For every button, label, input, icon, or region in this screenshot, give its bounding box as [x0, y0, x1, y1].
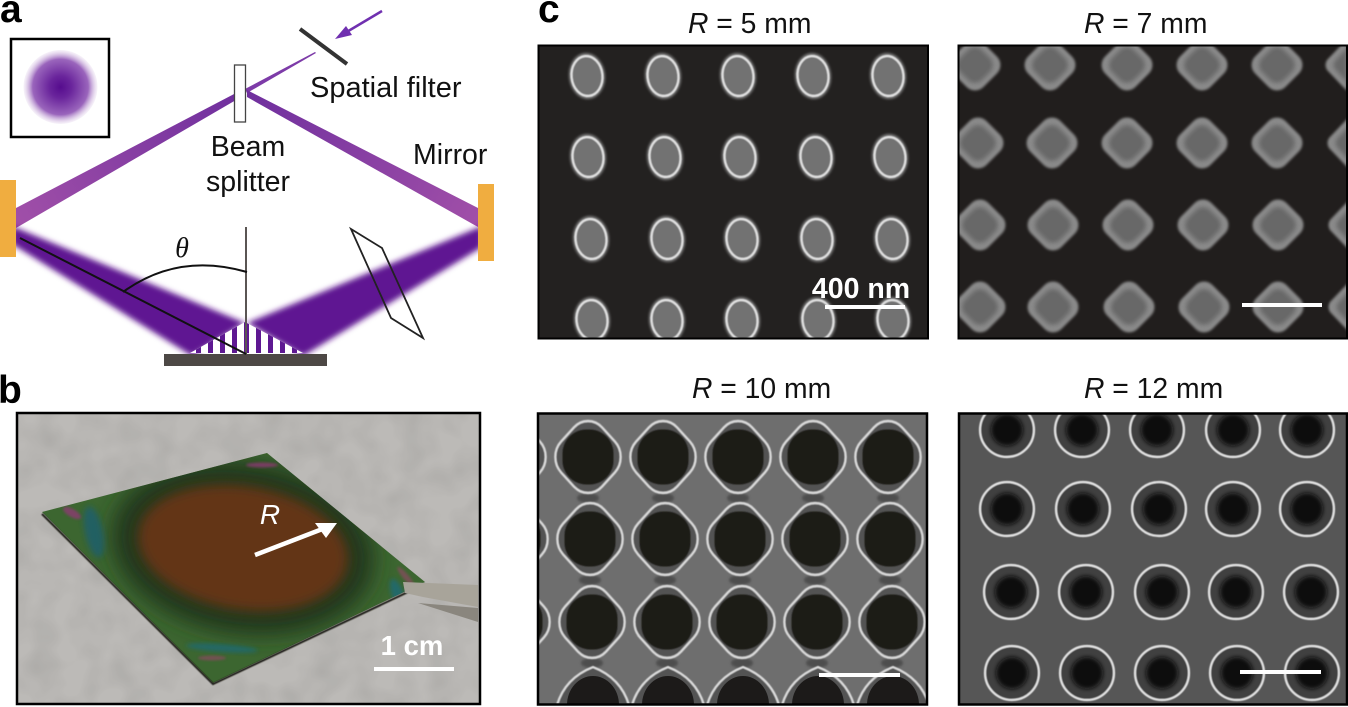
- scale bar: [1240, 670, 1321, 674]
- interference fringe pattern: [190, 322, 303, 353]
- scale bar: [825, 305, 905, 309]
- SEM panel: R = 5 mm: [538, 7, 928, 345]
- icon: incoming laser arrow: [335, 11, 382, 39]
- label: theta: θ: [175, 233, 189, 264]
- scale bar: [374, 667, 454, 671]
- beam splitter: [234, 65, 246, 122]
- spatial filter slit: [300, 29, 347, 64]
- SEM image: hole lattice: [539, 414, 926, 704]
- scale bar: [819, 673, 900, 677]
- wafer with structural colour: [42, 442, 425, 684]
- scale label 1 cm: 1 cm: [381, 630, 443, 661]
- heading R = 12 mm: R = 12 mm: [1084, 372, 1223, 404]
- frame: [17, 413, 480, 704]
- radius arrow: [255, 523, 337, 555]
- heading R = 5 mm: R = 5 mm: [688, 7, 811, 39]
- right mirror: [478, 184, 494, 261]
- lower right beam: [247, 226, 482, 356]
- lower left beam: [12, 226, 245, 356]
- upper left beam: [16, 93, 236, 228]
- scale bar: [1242, 303, 1322, 307]
- frame: [538, 46, 928, 338]
- label: beam splitter: Beam: [211, 131, 285, 163]
- angle arc: [123, 265, 247, 292]
- label: mirror: Mirror: [413, 139, 488, 171]
- SEM image: diamond pillars: [945, 35, 1348, 339]
- SEM panel: R = 7 mm: [945, 7, 1348, 339]
- frame: [959, 414, 1347, 704]
- thin incoming beam: [245, 52, 316, 93]
- SEM image: nanopillars: [538, 45, 928, 345]
- heading R = 7 mm: R = 7 mm: [1084, 7, 1207, 39]
- SEM panel: R = 10 mm: [536, 378, 928, 706]
- tweezers: [403, 582, 478, 622]
- inset: beam intensity profile: [11, 39, 109, 137]
- normal line: [245, 227, 247, 354]
- SEM panel: R = 12 mm: [958, 372, 1348, 705]
- label: spatial filter: Spatial filter: [310, 72, 462, 104]
- label: beam splitter: splitter: [206, 166, 290, 198]
- frame: [538, 414, 927, 704]
- substrate: [164, 354, 327, 366]
- photo background: [17, 413, 480, 704]
- sample plane parallelogram: [351, 229, 423, 338]
- SEM image: ring wells: [958, 403, 1348, 705]
- upper right beam: [247, 90, 478, 227]
- frame: [958, 46, 1347, 338]
- label: R: R: [260, 499, 280, 530]
- left mirror: [0, 180, 16, 257]
- heading R = 10 mm: R = 10 mm: [692, 372, 831, 404]
- panel a: interference lithography setup: [0, 0, 494, 366]
- panel b: photo of patterned sample: [0, 369, 480, 704]
- beam axis line: [20, 238, 246, 354]
- scale label 400 nm: 400 nm: [812, 273, 910, 305]
